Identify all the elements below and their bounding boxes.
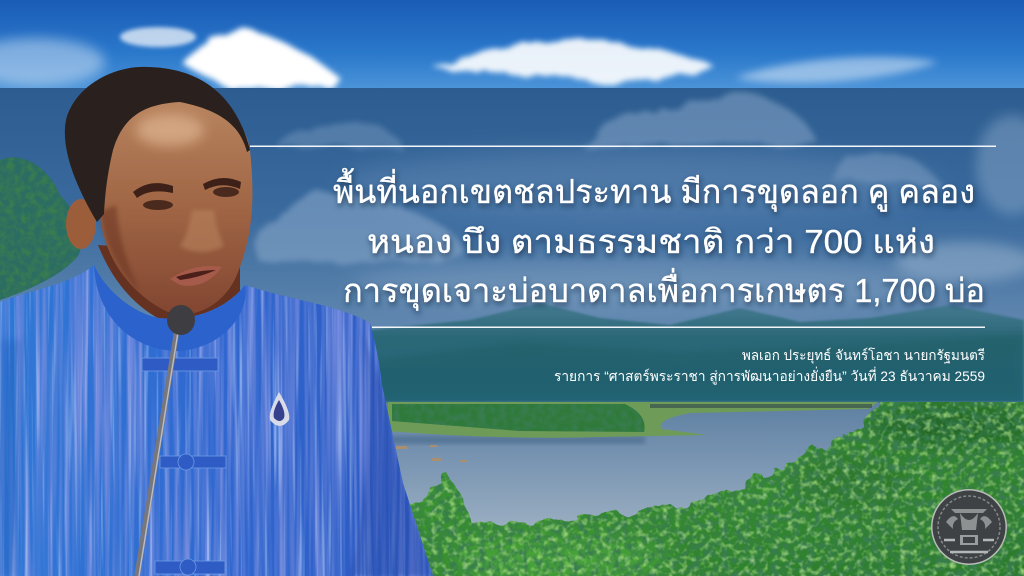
main statement text: [333, 168, 985, 311]
person speaking: [0, 67, 434, 576]
speaker name: พลเอก ประยุทธ์ จันทร์โอชา นายกรัฐมนตรี: [742, 347, 985, 364]
microphone: [137, 305, 195, 576]
face: [100, 96, 252, 314]
lapel pin: [270, 392, 289, 426]
brows, eyes, nose and mouth details: [133, 178, 241, 286]
forest foreground: [380, 395, 1024, 576]
collar: [94, 265, 246, 351]
translucent banner with faded clouds and mountains: [0, 88, 1024, 402]
ear: [66, 199, 96, 249]
bottom rule: [372, 326, 985, 328]
line 2: หนอง บึง ตามธรรมชาติ กว่า 700 แห่ง: [367, 223, 935, 260]
tree on left of banner: [0, 157, 80, 300]
line 1: พื้นที่นอกเขตชลประทาน มีการขุดลอก คู คลอง: [333, 168, 975, 212]
far shore and forested island: [388, 402, 878, 462]
programme and date: รายการ “ศาสตร์พระราชา สู่การพัฒนาอย่างยั่งยืน” วันที่ 23 ธันวาคม 2559: [554, 367, 985, 385]
top rule: [250, 146, 996, 147]
neck: [98, 245, 240, 324]
boats on lake: [396, 445, 467, 462]
hair: [65, 67, 250, 222]
attribution text: [554, 347, 985, 385]
shirt: [0, 265, 433, 576]
clouds in sky: [0, 27, 938, 88]
line 3: การขุดเจาะบ่อบาดาลเพื่อการเกษตร 1,700 บ่อ: [343, 268, 985, 311]
shirt fabric streaks: [0, 260, 434, 576]
face side shadow: [100, 205, 140, 292]
government seal: [931, 489, 1007, 565]
chinese knot buttons: [142, 358, 226, 575]
forehead highlight: [136, 114, 204, 146]
lake: [380, 404, 900, 534]
